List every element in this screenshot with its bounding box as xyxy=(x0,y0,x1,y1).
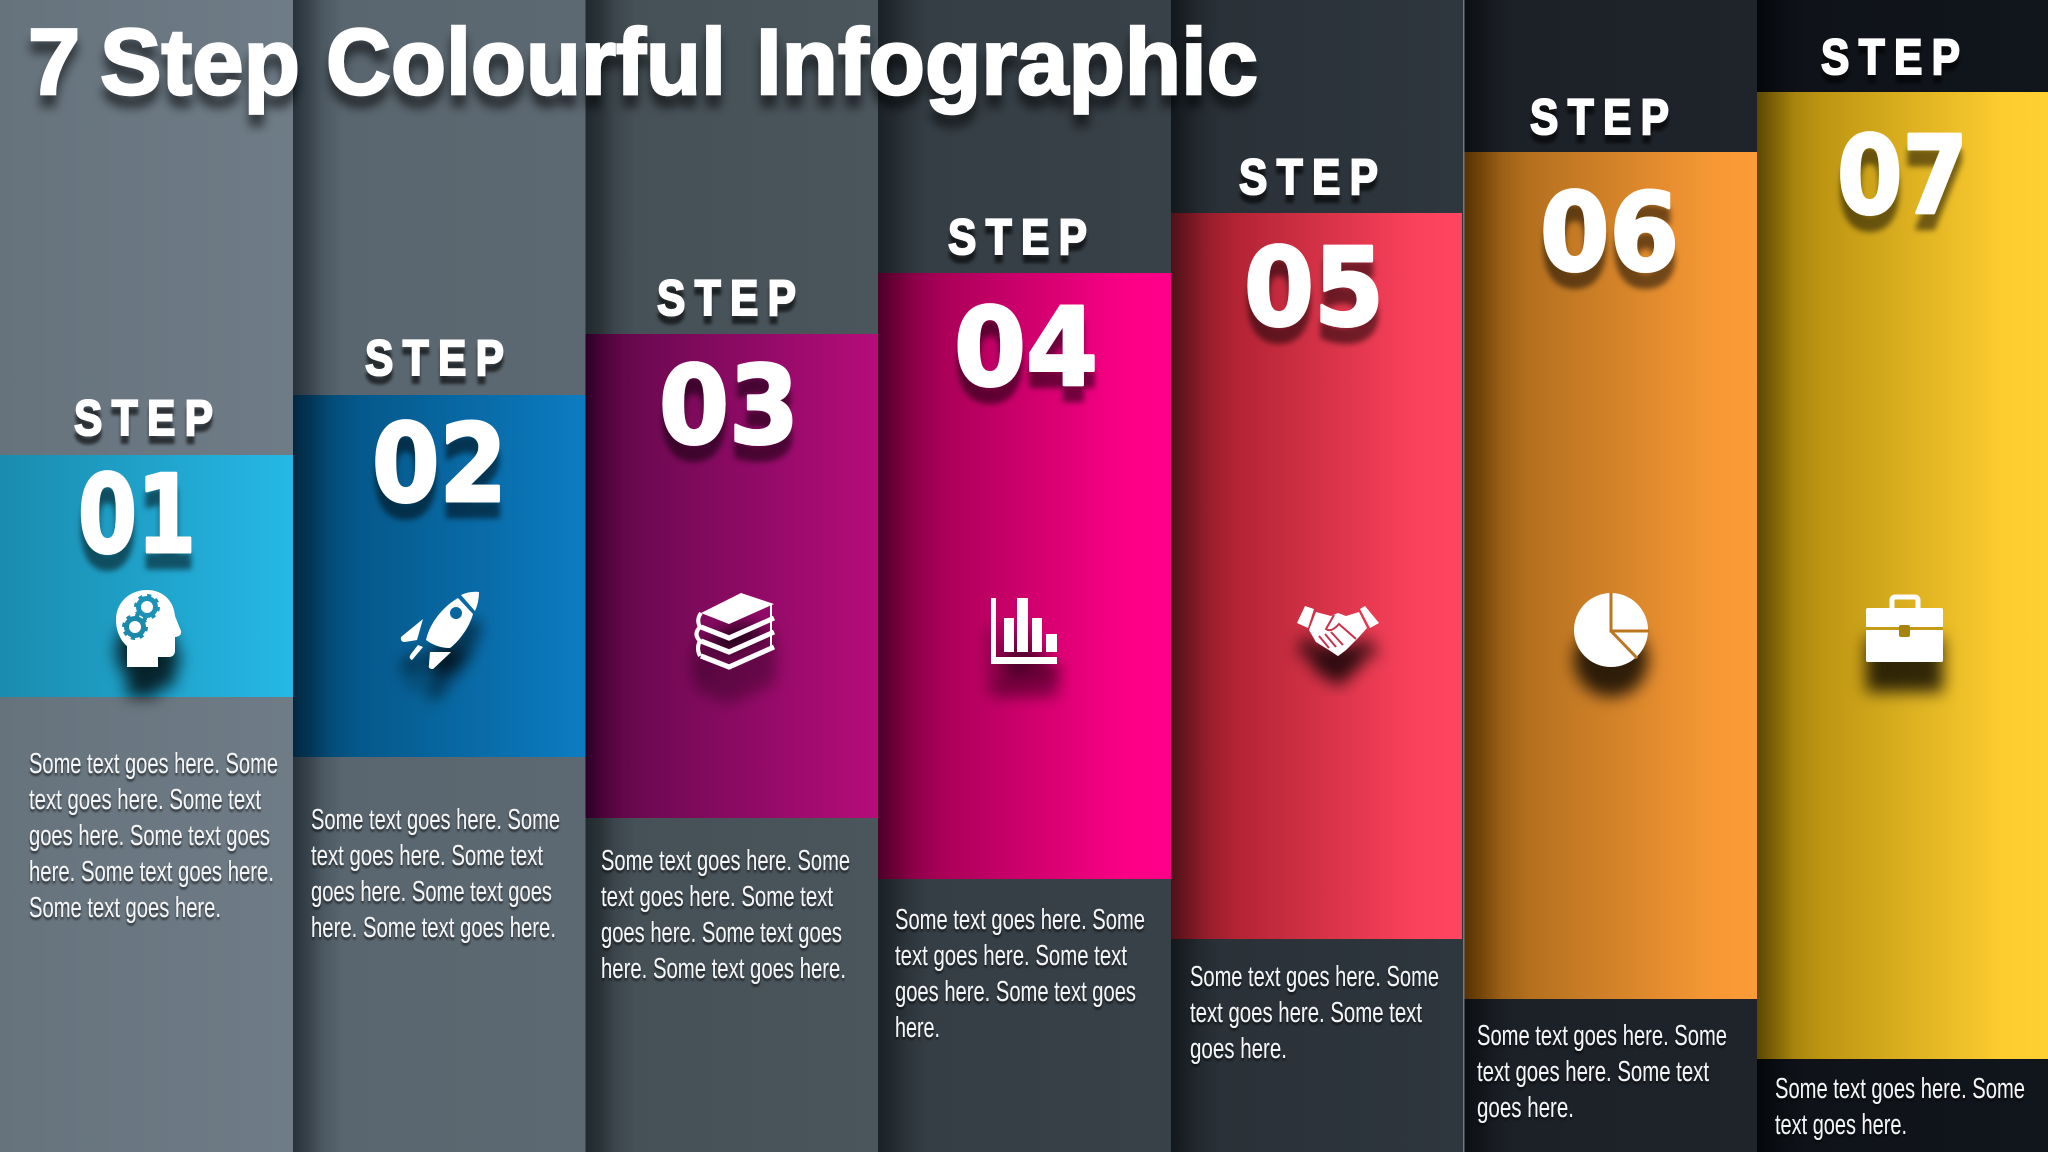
number 06: 06 xyxy=(1540,171,1679,296)
number 01: 01 xyxy=(78,453,196,578)
text block 4: goes here. Some text goes xyxy=(895,976,1136,1008)
text block 1: Some text goes here. xyxy=(29,892,221,924)
text block 6 xyxy=(1477,1020,1727,1124)
number 03: 03 xyxy=(659,344,799,469)
text block 3 xyxy=(601,845,850,985)
title: Step xyxy=(100,9,300,114)
text block 3: goes here. Some text goes xyxy=(601,917,842,949)
band: step 6 colour block xyxy=(1464,152,1757,999)
text block 1 xyxy=(29,748,278,924)
text block 3: Some text goes here. Some xyxy=(601,845,850,877)
text block 2: text goes here. Some text xyxy=(311,840,543,872)
panel: step 2 column xyxy=(293,0,586,1152)
text block 1: goes here. Some text goes xyxy=(29,820,270,852)
text block 3: text goes here. Some text xyxy=(601,881,833,913)
band: step 4 colour block xyxy=(878,273,1171,879)
title: 7 xyxy=(28,9,80,114)
step label 5: STEP xyxy=(1239,149,1387,205)
text block 6: Some text goes here. Some xyxy=(1477,1020,1727,1052)
step label 7: STEP xyxy=(1821,29,1969,85)
text block 5: goes here. xyxy=(1190,1033,1287,1065)
band: step 5 colour block xyxy=(1171,213,1462,939)
icon: briefcase xyxy=(1866,597,1943,662)
text block 4 xyxy=(895,904,1145,1044)
panel: step 1 column xyxy=(0,0,293,1152)
text block 2 xyxy=(311,804,560,944)
number 05: 05 xyxy=(1244,226,1384,351)
text block 1: text goes here. Some text xyxy=(29,784,261,816)
icon: stacked books xyxy=(696,593,774,667)
title: Colourful xyxy=(326,9,726,114)
text block 7 xyxy=(1775,1073,2025,1141)
number 04: 04 xyxy=(954,286,1098,411)
band: step 3 colour block xyxy=(586,334,878,818)
number 07: 07 xyxy=(1837,114,1968,239)
panel: step 4 column xyxy=(878,0,1171,1152)
icon: head with gears xyxy=(116,590,181,667)
text block 3: here. Some text goes here. xyxy=(601,953,846,985)
panel: step 5 column xyxy=(1171,0,1464,1152)
band: step 2 colour block xyxy=(293,395,586,757)
text block 7: text goes here. xyxy=(1775,1109,1907,1141)
text block 1: Some text goes here. Some xyxy=(29,748,278,780)
text block 2: here. Some text goes here. xyxy=(311,912,556,944)
band: step 7 colour block xyxy=(1757,92,2048,1059)
text block 2: Some text goes here. Some xyxy=(311,804,560,836)
panel: step 3 column xyxy=(586,0,878,1152)
step label 2: STEP xyxy=(365,330,513,386)
text block 6: goes here. xyxy=(1477,1092,1574,1124)
text block 2: goes here. Some text goes xyxy=(311,876,552,908)
icon: rocket xyxy=(401,592,479,669)
panel: step 6 column xyxy=(1464,0,1757,1152)
step label 4: STEP xyxy=(948,209,1096,265)
text block 5: text goes here. Some text xyxy=(1190,997,1422,1029)
step label 6: STEP xyxy=(1530,89,1678,145)
icon: handshake xyxy=(1297,606,1379,656)
band: step 1 colour block xyxy=(0,455,293,697)
step label 3: STEP xyxy=(657,270,805,326)
icon: pie chart xyxy=(1574,593,1649,667)
text block 6: text goes here. Some text xyxy=(1477,1056,1709,1088)
title: Infographic xyxy=(756,9,1258,114)
text block 5: Some text goes here. Some xyxy=(1190,961,1439,993)
text block 1: here. Some text goes here. xyxy=(29,856,274,888)
step label 1: STEP xyxy=(74,390,222,446)
number 02: 02 xyxy=(372,402,507,527)
text block 5 xyxy=(1190,961,1439,1065)
text block 4: here. xyxy=(895,1012,940,1044)
icon: bar chart xyxy=(991,598,1057,664)
title xyxy=(28,9,1258,114)
panel: step 7 column xyxy=(1757,0,2048,1152)
text block 4: Some text goes here. Some xyxy=(895,904,1145,936)
text block 4: text goes here. Some text xyxy=(895,940,1127,972)
